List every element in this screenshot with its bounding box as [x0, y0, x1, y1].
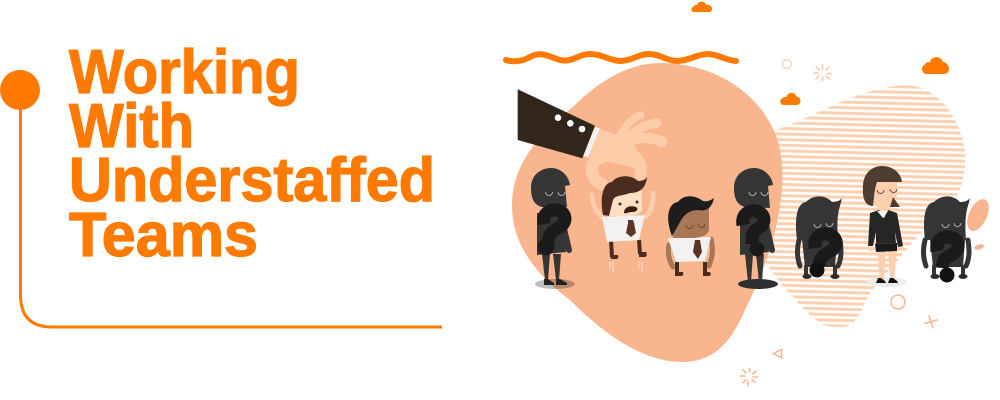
figure: silhouette woman 1: [531, 168, 575, 289]
icon: top burst: [814, 65, 831, 81]
title: Working: [69, 38, 300, 107]
title: [69, 38, 435, 270]
icon: small ring: [782, 60, 792, 68]
icon: cross: [925, 316, 937, 328]
figure: hand and sleeve: [518, 89, 662, 184]
splash shapes: [963, 196, 993, 251]
icon: top cloud: [691, 2, 712, 12]
title: Understaffed: [69, 146, 435, 215]
icon: triangle: [774, 350, 782, 358]
title: Teams: [69, 201, 258, 270]
figure: silhouette woman 2: [734, 168, 778, 289]
icon: bottom burst: [740, 368, 758, 386]
striped blob: [755, 85, 965, 327]
icon: right cloud: [922, 57, 949, 74]
figure: standing man: [668, 196, 714, 276]
figure: silhouette man 2: [923, 196, 970, 282]
wave line: [506, 54, 736, 61]
figure: silhouette man 1: [796, 196, 842, 279]
icon: middle cloud: [780, 93, 800, 105]
figure: woman in suit: [863, 166, 907, 287]
icon: large ring: [891, 295, 905, 309]
title bracket: [0, 70, 442, 327]
figure: lifted man: [592, 176, 653, 272]
title: With: [69, 92, 194, 161]
peach blob: [512, 63, 782, 362]
